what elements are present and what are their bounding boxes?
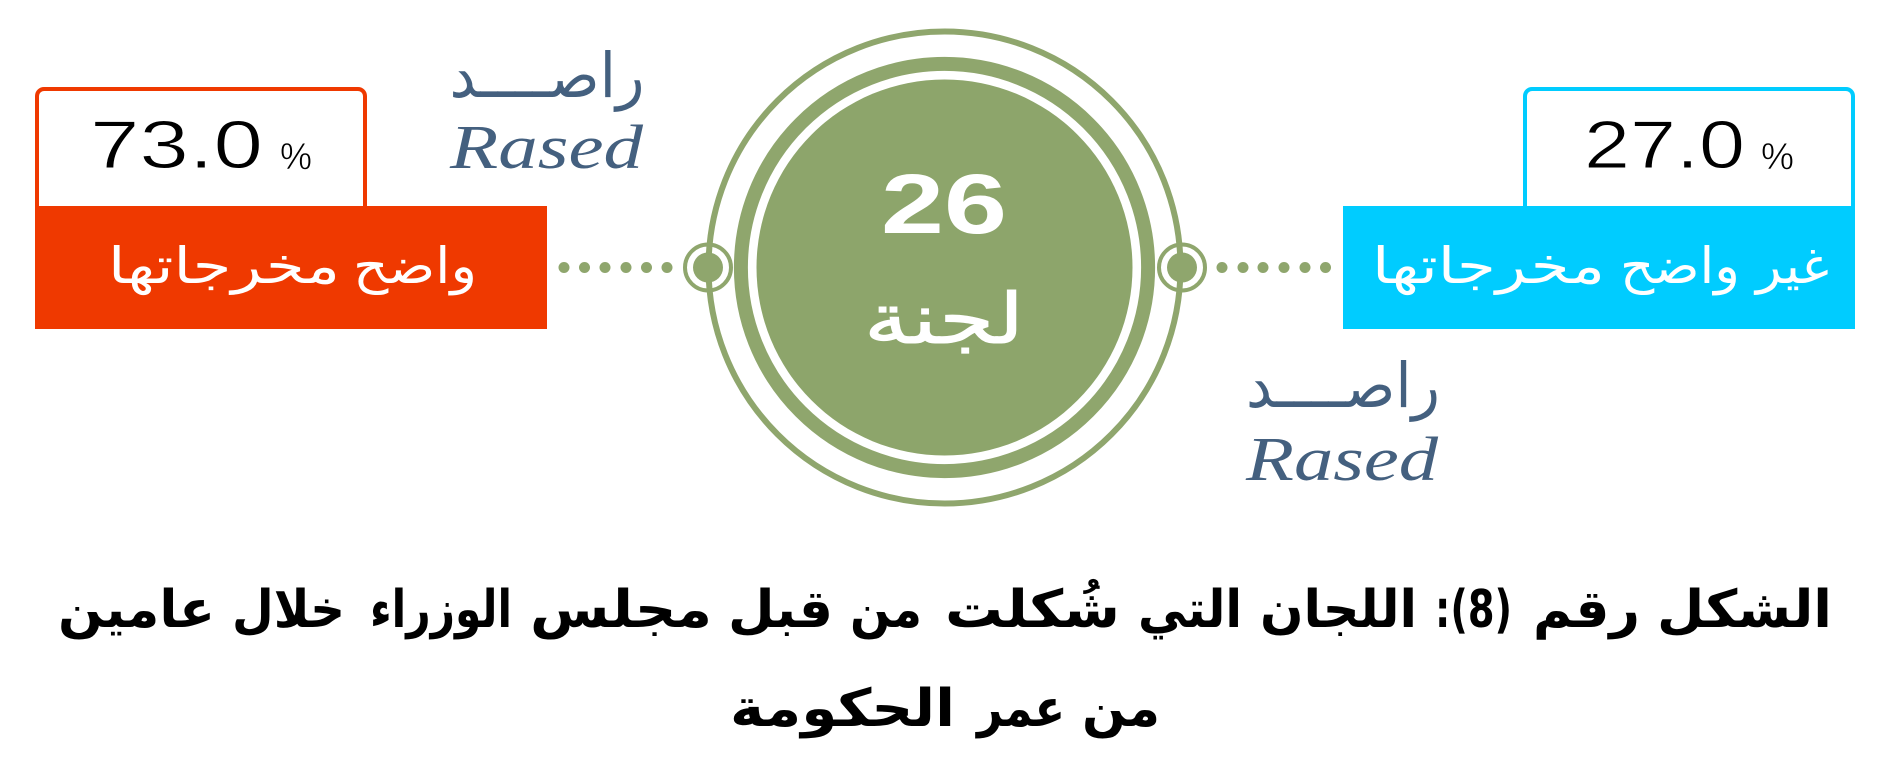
figure caption: الوزراء [370, 580, 512, 640]
figure caption: من [850, 580, 922, 640]
figure caption: (8): [1435, 580, 1512, 640]
panel: unclear-outputs card [1343, 89, 1855, 329]
figure caption: مجلس [530, 580, 712, 640]
figure caption: من [1082, 679, 1160, 739]
figure caption: قبل [728, 580, 833, 640]
figure caption: شُكلت [945, 578, 1120, 640]
right percentage box [1525, 89, 1853, 214]
watermark: Rased bottom right: راصــــد [1246, 349, 1440, 422]
figure caption: الشكل [1657, 580, 1832, 640]
figure caption: عامين [58, 580, 215, 640]
figure caption: الحكومة [730, 679, 955, 739]
central circle: 26 committees [685, 32, 1205, 504]
figure caption: عمر [974, 679, 1065, 739]
left label bar [35, 206, 547, 329]
watermark: Rased top left [449, 39, 644, 182]
committee word: لجنة [864, 278, 1024, 360]
right label bar [1343, 206, 1855, 329]
left label bar: مخرجاتها [108, 237, 340, 296]
right label bar: واضح [1620, 237, 1740, 296]
left percentage box: % [280, 136, 312, 178]
left label bar: واضح [353, 237, 477, 296]
right percentage box: % [1761, 136, 1794, 178]
figure caption: خلال [232, 580, 345, 640]
watermark: Rased bottom right [1245, 349, 1440, 494]
watermark: Rased top left: Rased [449, 114, 644, 182]
left node [685, 244, 731, 290]
watermark: Rased bottom right: Rased [1245, 426, 1439, 494]
right node [1159, 244, 1205, 290]
left dotted connector [558, 262, 672, 273]
right label bar: غير [1753, 237, 1829, 295]
right dotted connector [1216, 262, 1331, 273]
left percentage box [37, 89, 365, 214]
left percentage box: 73.0 [90, 107, 263, 183]
figure caption [58, 578, 1832, 739]
watermark: Rased top left: راصــــد [450, 39, 644, 112]
committee count: 26 [881, 157, 1007, 251]
figure caption: التي [1138, 580, 1242, 640]
panel: left clear-outputs card [35, 89, 547, 329]
figure caption: اللجان [1260, 580, 1417, 640]
figure caption: رقم [1533, 580, 1640, 640]
right label bar: مخرجاتها [1372, 237, 1605, 296]
right percentage box: 27.0 [1584, 107, 1745, 183]
